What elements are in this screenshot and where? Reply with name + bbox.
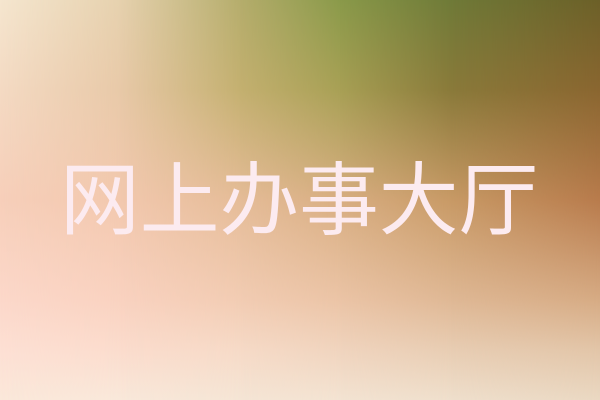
title: 网上办事大厅 (60, 156, 538, 245)
